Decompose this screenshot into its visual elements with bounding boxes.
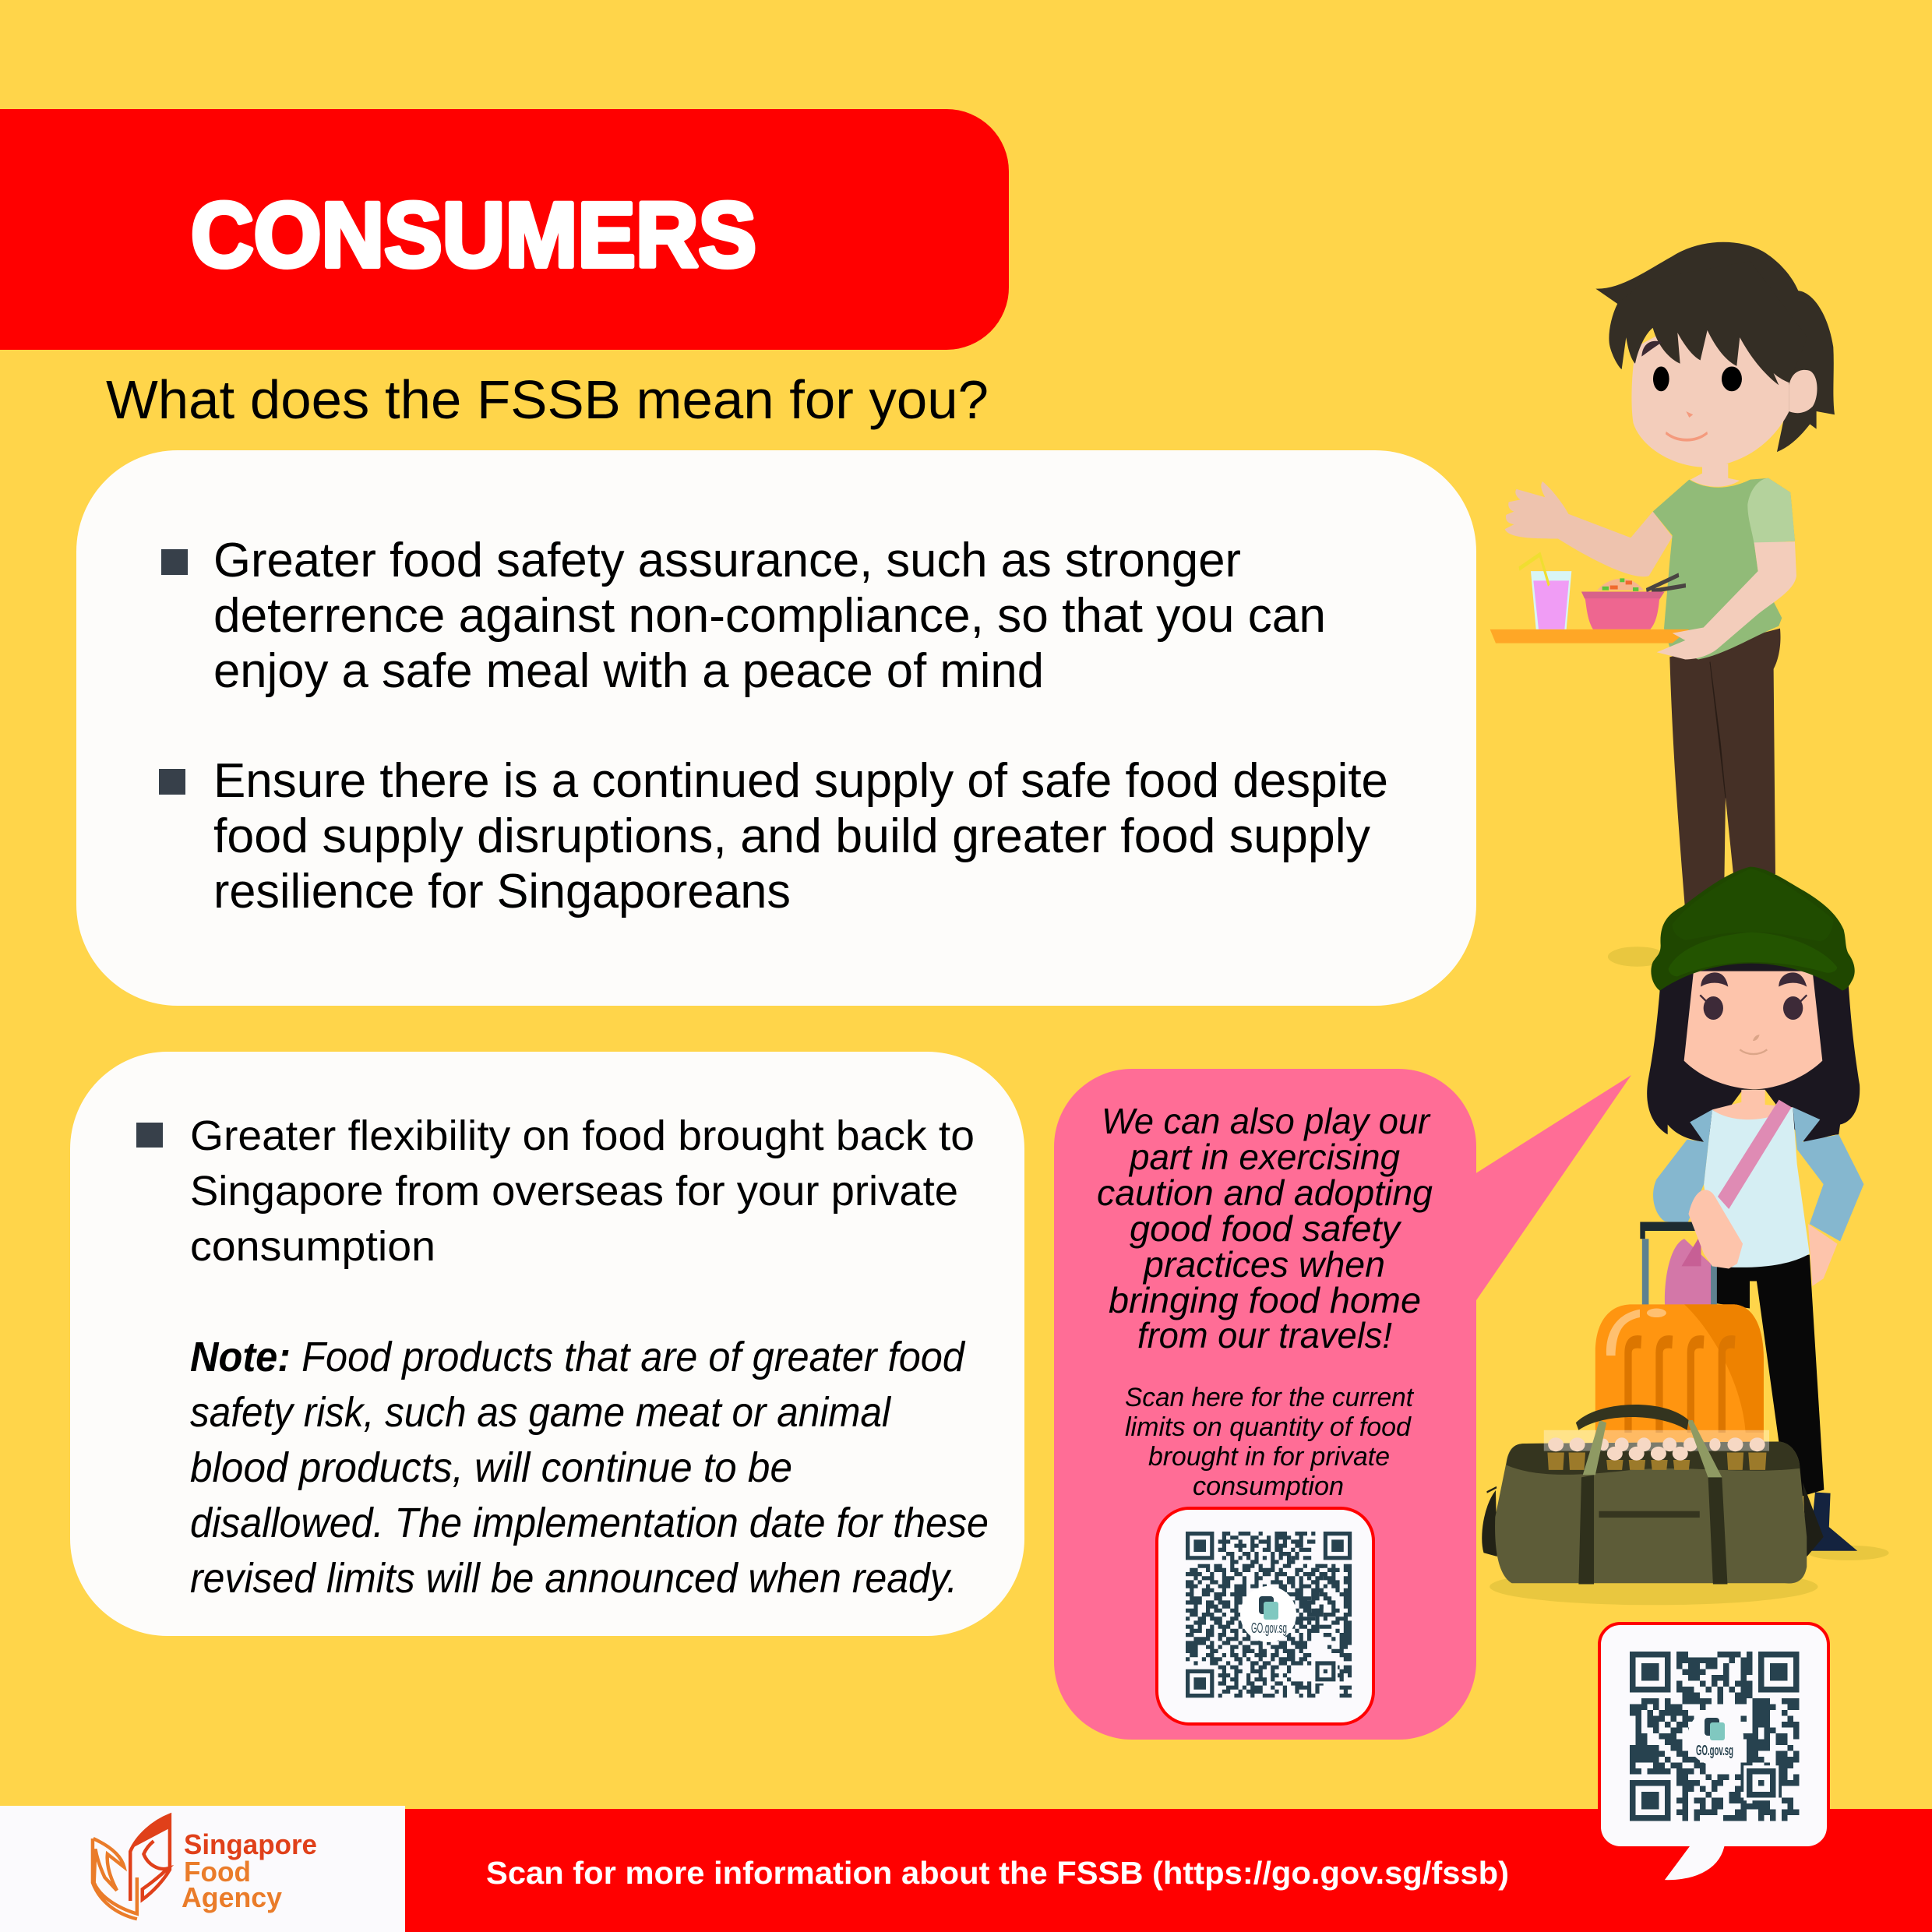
bullet: food safety assurance — [161, 534, 1326, 698]
bullet: greater flexibility — [136, 1112, 975, 1270]
QR code: more information speech bubble — [1599, 1624, 1828, 1881]
girl shirt and jacket — [1653, 1090, 1863, 1267]
pink backpack — [1665, 1234, 1711, 1306]
advice text: from our travels! — [1137, 1315, 1392, 1356]
duffel bag — [1482, 1441, 1824, 1583]
logo text: Agency — [182, 1881, 282, 1913]
panel: food safety and supply benefits — [76, 450, 1476, 1006]
note text — [190, 1334, 989, 1602]
icon: Singapore Food Agency leaf — [93, 1815, 170, 1919]
bullet: food safety assurance: Greater food safety assurance, such as stronger — [213, 534, 1241, 587]
bullet: continued food supply: food supply disruptions, and build greater food supply — [213, 809, 1370, 863]
scan instruction — [1125, 1383, 1415, 1501]
title: CONSUMERS — [191, 184, 756, 287]
boy raised arm — [1505, 481, 1673, 576]
logo text: Food — [184, 1856, 251, 1888]
logo text — [182, 1828, 317, 1913]
boy trousers — [1669, 629, 1781, 905]
QR code: limits on food: GO.gov.sg — [1251, 1620, 1287, 1636]
subtitle: What does the FSSB mean for you? — [106, 369, 989, 430]
bullet: greater flexibility: Singapore from overseas for your private — [190, 1168, 958, 1215]
logo text: Singapore — [184, 1828, 317, 1860]
suitcase handle — [1643, 1226, 1714, 1306]
suitcase — [1595, 1304, 1764, 1443]
girl shoe — [1810, 1493, 1857, 1551]
scan instruction: Scan here for the current — [1125, 1383, 1415, 1412]
boy head — [1595, 242, 1835, 487]
advice text — [1097, 1101, 1433, 1356]
illustration: boy holding food tray — [1490, 242, 1835, 905]
panel: food brought back from overseas — [70, 1052, 1024, 1636]
QR code: limits on food — [1157, 1508, 1373, 1724]
bullet: continued food supply: Ensure there is a continued supply of safe food despite — [213, 754, 1388, 808]
scan instruction: limits on quantity of food — [1125, 1412, 1412, 1442]
bullet: food safety assurance: deterrence against non-compliance, so that you can — [213, 589, 1326, 643]
footer text: Scan for more information about the FSSB (https://go.gov.sg/fssb) — [486, 1855, 1509, 1891]
noodle bowl — [1581, 575, 1686, 629]
speech bubble: travel advice — [1054, 1069, 1631, 1740]
advice text: good food safety — [1130, 1208, 1402, 1249]
note text: disallowed. The implementation date for these — [190, 1500, 989, 1546]
bullet: continued food supply: resilience for Singaporeans — [213, 865, 791, 918]
girl trousers — [1716, 1255, 1824, 1497]
girl body and luggage — [1482, 947, 1889, 1605]
advice text: part in exercising — [1128, 1137, 1400, 1177]
boy shirt — [1653, 478, 1795, 659]
scan instruction: consumption — [1193, 1472, 1344, 1501]
illustration: girl with luggage and eggs — [1482, 867, 1889, 1605]
girl head and hat — [1651, 867, 1855, 1089]
scan instruction: brought in for private — [1148, 1442, 1390, 1472]
bullet: food safety assurance: enjoy a safe meal with a peace of mind — [213, 644, 1044, 698]
egg trays — [1544, 1430, 1769, 1470]
note text: safety risk, such as game meat or animal — [190, 1389, 892, 1436]
girl hands — [1688, 1190, 1838, 1286]
advice text: bringing food home — [1109, 1280, 1421, 1320]
boy tray arm — [1657, 541, 1796, 659]
advice text: We can also play our — [1102, 1101, 1431, 1141]
footer: red bar — [405, 1809, 1932, 1932]
banner: consumers — [0, 109, 1009, 350]
drink glass — [1519, 555, 1571, 629]
advice text: practices when — [1142, 1244, 1385, 1285]
ground shadows — [1490, 947, 1889, 1605]
girl hair back — [1647, 961, 1860, 1142]
note text: revised limits will be announced when ready. — [190, 1555, 957, 1602]
bullet: greater flexibility: Greater flexibility on food brought back to — [190, 1112, 975, 1159]
footer: logo panel — [0, 1806, 405, 1932]
QR code: more information speech bubble: GO.gov.sg — [1696, 1743, 1733, 1758]
bullet: continued food supply — [159, 754, 1388, 918]
note text: Note: Food products that are of greater food — [190, 1334, 966, 1380]
note text: blood products, will continue to be — [190, 1444, 792, 1491]
bag straps and handles — [1576, 1405, 1727, 1585]
tray — [1490, 629, 1689, 643]
advice text: caution and adopting — [1097, 1172, 1433, 1213]
bullet: greater flexibility: consumption — [190, 1223, 435, 1270]
